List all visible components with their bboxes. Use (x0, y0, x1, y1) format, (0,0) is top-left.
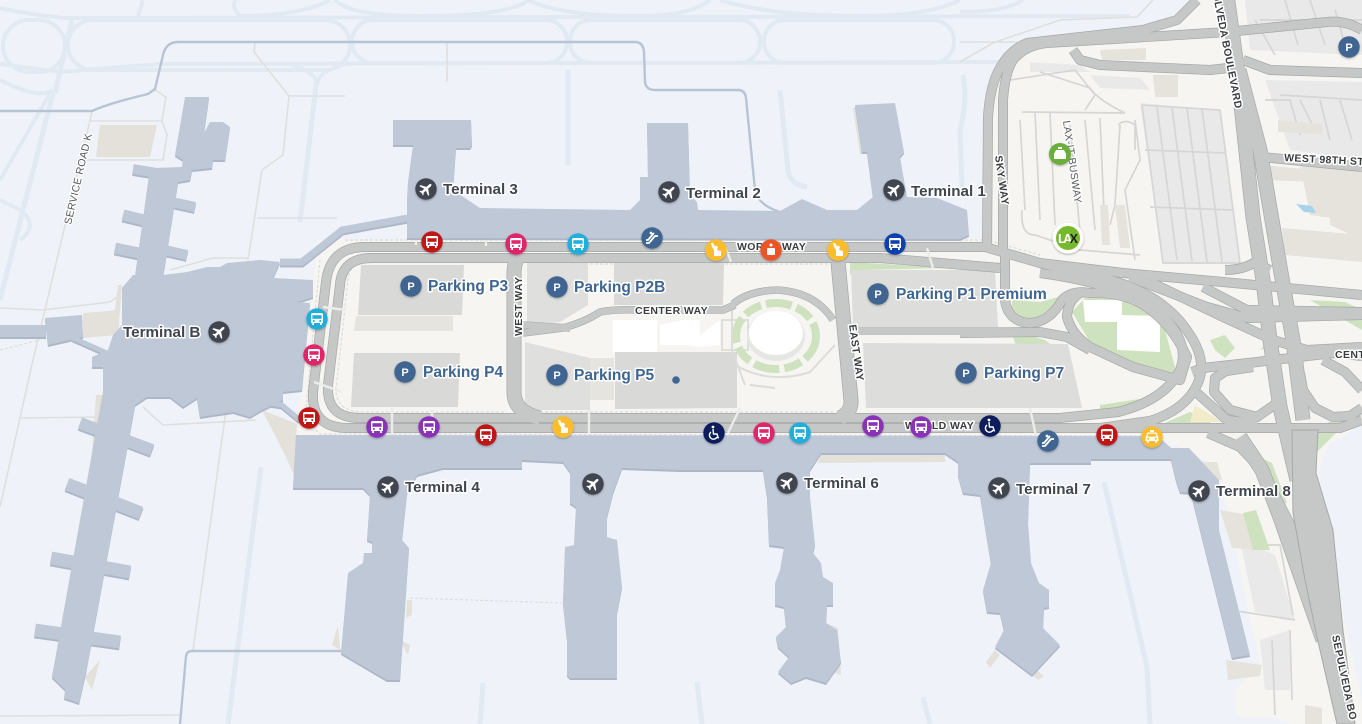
parking P1 structure (851, 270, 998, 327)
Parking P1 Premium (867, 283, 1047, 305)
wheelchair markers (703, 415, 1001, 444)
Parking P3 (400, 275, 508, 297)
LAX-it logo marker: LAX (1058, 232, 1079, 246)
airfield service lines (0, 42, 780, 724)
road label: World Way south: WORLD WAY (905, 420, 974, 432)
Parking P4 (394, 361, 503, 383)
parking P5 right (615, 352, 737, 409)
Parking P2B: P (553, 282, 561, 294)
central buildings and stadium (613, 300, 1160, 388)
beige P3 lower (354, 316, 453, 331)
pedestrian paths (305, 240, 1160, 436)
yellow pedestrian markers (552, 239, 849, 438)
Parking P7: Parking P7 (984, 365, 1064, 382)
parking labels (394, 36, 1360, 386)
red bus stops (298, 231, 1118, 446)
beige apron patch (96, 125, 157, 157)
Terminal 5 icon (582, 473, 604, 495)
Parking P3: Parking P3 (428, 278, 508, 295)
parking P4 structure (351, 353, 460, 407)
Sepulveda merged carriageway (1292, 430, 1355, 724)
green areas (850, 262, 1362, 550)
landside beige buildings (1100, 48, 1362, 724)
Terminal 8 label (1188, 480, 1291, 502)
parking P7 structure (863, 343, 1082, 408)
outlying parking marker (1338, 36, 1360, 58)
pink bus stops (303, 233, 775, 444)
Parking P1 Premium: Parking P1 Premium (896, 286, 1047, 303)
road label: Sepulveda Boulevard south: SEPULVEDA BO (1329, 634, 1359, 721)
road network (313, 0, 1362, 640)
blue bus stop (884, 233, 906, 255)
escalator markers (641, 227, 1059, 452)
Parking P3: P (407, 281, 415, 293)
road label: LAX-it busway: LAX-IT BUSWAY (1060, 120, 1084, 204)
Terminal 2 label: Terminal 2 (686, 185, 761, 202)
Parking P2B (546, 276, 665, 298)
parking P2B right (614, 263, 724, 305)
landside ground (296, 0, 1362, 724)
Terminal B label: Terminal B (123, 324, 200, 341)
Terminal 7 label (988, 477, 1091, 499)
road label: Center Way: CENTER WAY (635, 305, 708, 317)
Parking P5: P (553, 370, 561, 382)
Terminal 4 label (377, 476, 480, 498)
Parking P5 (546, 364, 654, 386)
road label: World Way north: WORLD WAY (737, 241, 806, 253)
apron strips by terminals (52, 108, 1044, 690)
beige between P5 (590, 358, 614, 400)
Terminal 3 label (415, 178, 518, 200)
Parking P1 Premium: P (874, 289, 882, 301)
Terminal 1 label (883, 179, 986, 201)
small location dot (672, 376, 680, 384)
pond (1296, 204, 1316, 213)
taxi marker (1141, 426, 1163, 448)
Terminal 4 label: Terminal 4 (405, 479, 480, 496)
LAX-it shuttle marker (1049, 143, 1071, 165)
Terminal 6 label (776, 472, 879, 494)
terminal labels (123, 178, 1291, 502)
purple bus stops (366, 415, 932, 438)
LAX-it logo marker (1052, 222, 1084, 254)
Terminal B label (123, 321, 230, 343)
Terminal 1 label: Terminal 1 (911, 183, 986, 200)
pedestrian crossings (314, 238, 1036, 436)
transit markers (298, 143, 1163, 452)
Parking P4: P (401, 367, 409, 379)
road label: East Way: EAST WAY (846, 324, 866, 382)
Terminal 7 label: Terminal 7 (1016, 481, 1091, 498)
road label: Sky Way: SKY WAY (992, 155, 1011, 206)
lot lines (870, 0, 1362, 715)
Parking P2B: Parking P2B (574, 279, 665, 296)
parking P5 left (525, 342, 590, 410)
Terminal 3 label: Terminal 3 (443, 181, 518, 198)
terminal buildings (0, 99, 1250, 705)
Parking P4: Parking P4 (423, 364, 503, 381)
parking P2B left (527, 263, 588, 325)
road label: service road K: SERVICE ROAD K (62, 132, 95, 226)
Parking P7: P (962, 368, 970, 380)
outlying parking marker: P (1345, 42, 1353, 54)
Parking P5: Parking P5 (574, 367, 654, 384)
cyan bus stops (306, 233, 811, 444)
Terminal 2 label (658, 181, 761, 203)
orange elevator marker (760, 239, 782, 261)
Terminal 8 label: Terminal 8 (1216, 483, 1291, 500)
road label: West Way: WEST WAY (513, 277, 525, 336)
landside parking lots (896, 0, 1362, 690)
yellow wedge (1190, 405, 1222, 422)
parking structures (351, 263, 1082, 410)
Parking P7 (955, 362, 1064, 384)
Terminal 6 label: Terminal 6 (804, 475, 879, 492)
parking P3 structure (358, 265, 464, 315)
